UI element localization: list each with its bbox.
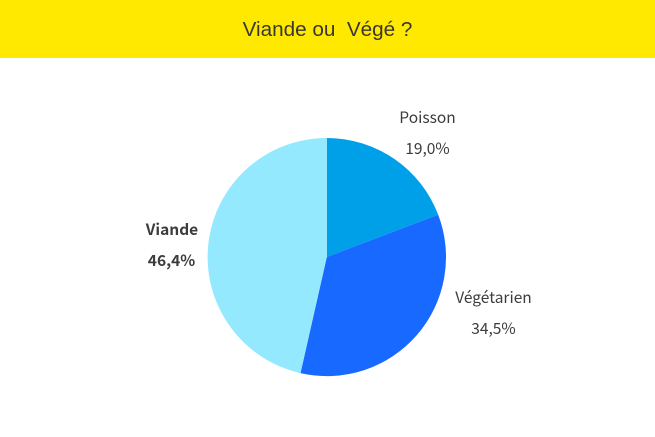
label: Poisson: Poisson [399,106,456,128]
pie chart [208,138,446,376]
label: Viande: Viande [145,218,198,240]
label: Poisson [399,106,456,159]
label: Viande: 46,4% [148,249,195,271]
slice: Viande [208,138,327,373]
label: Poisson: 19,0% [405,137,450,159]
label: Végétarien [455,286,532,339]
label: Viande [145,218,198,271]
slice: Poisson [327,138,438,257]
label: Végétarien: Végétarien [455,286,532,308]
header band [0,0,655,58]
slice: Végétarien [300,215,446,376]
label: Végétarien: 34,5% [471,317,516,339]
title: Viande ou Végé ? [243,18,412,41]
